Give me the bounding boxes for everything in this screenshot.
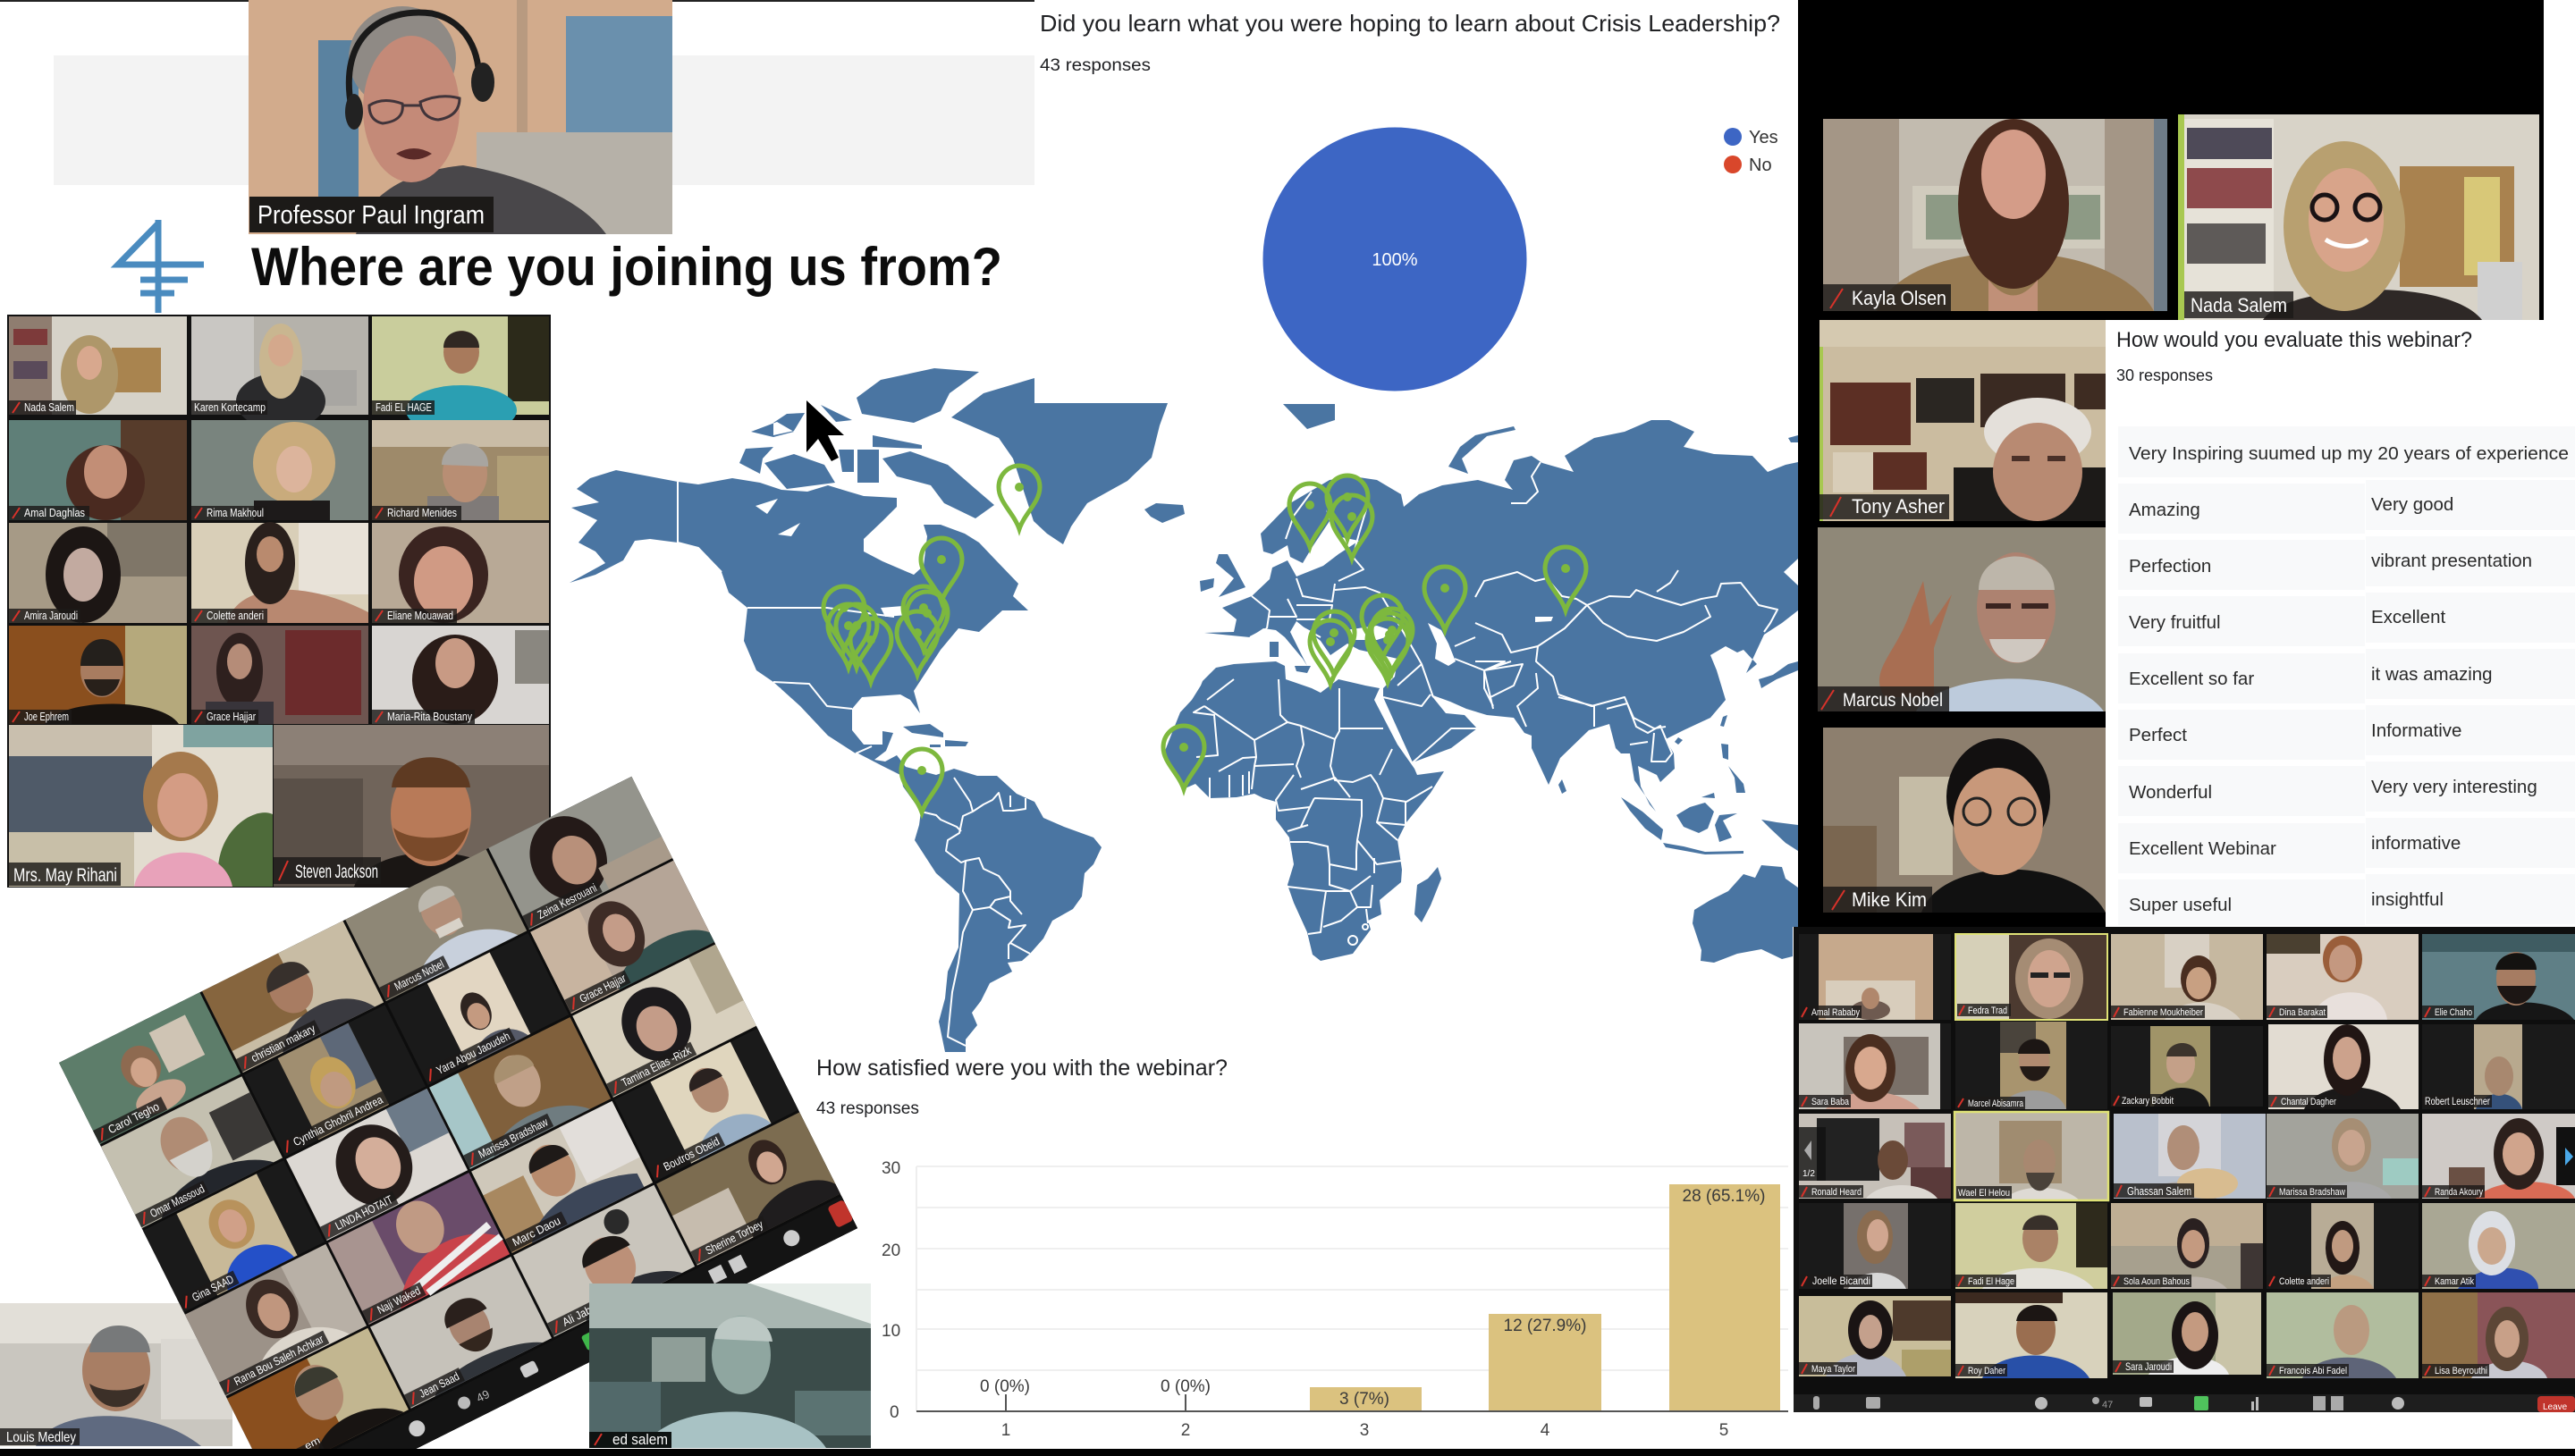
category labels: 1	[1001, 1421, 1010, 1440]
panel: learning pie chart	[1034, 0, 1798, 403]
video: Professor Paul Ingram	[249, 0, 672, 234]
tile: Colette anderi: Colette anderi	[207, 609, 264, 622]
video: Marcus Nobel: Marcus Nobel	[1843, 690, 1943, 711]
category labels: 4	[1541, 1421, 1550, 1440]
tile: Mrs. May Rihani	[9, 725, 273, 887]
tile: Sola Aoun Bahous	[2111, 1203, 2263, 1289]
panel: speakers column	[1818, 114, 2539, 913]
tile: Omar Massoud: Omar Massoud	[148, 1182, 207, 1220]
tile: Ronald Heard: Ronald Heard	[1811, 1187, 1862, 1198]
legend	[1724, 128, 1778, 175]
world map with participant pins	[570, 368, 1798, 1052]
tile: Amal Daghlas	[9, 420, 187, 520]
name label: Professor Paul Ingram	[258, 201, 485, 230]
North and Central America	[570, 470, 1028, 787]
tile: Nada Salem	[9, 316, 187, 415]
tile: Sherine Torbey: Sherine Torbey	[703, 1217, 765, 1258]
video: Mike Kim	[1823, 728, 2106, 913]
response text: Very very interesting	[2371, 777, 2537, 797]
tile: Fadi EL HAGE: Fadi EL HAGE	[376, 400, 432, 414]
tile: Sara Baba	[1799, 1023, 1951, 1109]
tile: Marcus Nobel: Marcus Nobel	[393, 957, 446, 993]
tile: Robert Leuschner: Robert Leuschner	[2425, 1097, 2490, 1107]
tile: Nada Salem: Nada Salem	[24, 400, 74, 414]
video: ed salem	[589, 1283, 871, 1448]
toolbar of rotated grid: 49	[474, 1387, 492, 1405]
tile: Amira Jaroudi: Amira Jaroudi	[24, 609, 78, 622]
tile: Boutros Obeid	[614, 1028, 798, 1182]
tile: Maria-Rita Boustany	[372, 626, 549, 724]
tile: Eliane Mouawad	[372, 523, 549, 623]
tile: Francois Abi Fadel	[2267, 1292, 2419, 1378]
title: Where are you joining us from?	[251, 237, 1002, 297]
tile: Naji Waked	[328, 1173, 510, 1325]
tile: Omar Massoud	[101, 1076, 283, 1228]
tile: Joe Ephrem rotated	[227, 1328, 409, 1456]
tile: Marissa Bradshaw	[2267, 1114, 2419, 1199]
tile: Wael El Helou: Wael El Helou	[1958, 1188, 2010, 1199]
tile: Carol Tegho: Carol Tegho	[106, 1099, 161, 1136]
tile: Ali Jaber: Ali Jaber	[560, 1299, 603, 1329]
tile: Dina Barakat	[2267, 934, 2419, 1020]
video: Louis Medley	[0, 1303, 232, 1446]
heading: evaluate question: How would you evaluate this webinar?	[2116, 328, 2472, 352]
Caribbean islands	[903, 724, 968, 747]
tile: Jean Saad	[370, 1257, 552, 1409]
tile: Amira Jaroudi	[9, 523, 187, 623]
Siberian river and lake lines	[1511, 462, 1678, 592]
tile: Marcus Nobel	[345, 849, 527, 1001]
tile: Grace Hajjar: Grace Hajjar	[207, 710, 257, 723]
y axis labels: 30	[882, 1159, 900, 1178]
tile: Amal Rababy: Amal Rababy	[1811, 1007, 1860, 1018]
baseline	[916, 1394, 1788, 1411]
panel: black speaker backdrop	[1798, 0, 2544, 927]
tile: Sara Jaroudi	[2113, 1292, 2261, 1375]
video: ed salem: ed salem	[612, 1431, 668, 1448]
icon: blue institute logo	[118, 220, 204, 313]
toolbar of lower-right grid	[1794, 1394, 2575, 1412]
category labels: 3	[1360, 1421, 1369, 1440]
value labels: 3 (7%)	[1339, 1390, 1389, 1409]
tile: Francois Abi Fadel: Francois Abi Fadel	[2279, 1366, 2347, 1376]
value labels: 0 (0%)	[1161, 1377, 1211, 1396]
tile: Rana Bou Saleh Achkar: Rana Bou Saleh Achkar	[232, 1332, 326, 1388]
tile: Naji Waked: Naji Waked	[375, 1283, 423, 1317]
text: bar responses: 43 responses	[816, 1099, 919, 1118]
response text: Super useful	[2129, 895, 2232, 915]
tile: Fedra Trad	[1955, 934, 2107, 1020]
tile: Elie Chaho: Elie Chaho	[2435, 1007, 2472, 1018]
panel: evaluate webinar responses	[2106, 320, 2575, 927]
tile: Carol Tegho	[59, 992, 241, 1144]
video: Nada Salem	[2178, 114, 2539, 320]
panel: lower-right video grid	[1794, 927, 2575, 1412]
tile: Joe Ephrem: Joe Ephrem	[24, 710, 69, 723]
tile: Robert Leuschner	[2422, 1024, 2575, 1109]
panel: left video grid	[7, 315, 551, 888]
response text: Very Inspiring suumed up my 20 years of experience	[2129, 443, 2569, 464]
video: Nada Salem: Nada Salem	[2191, 294, 2287, 316]
tile: Boutros Obeid: Boutros Obeid	[662, 1134, 722, 1174]
response text: informative	[2371, 833, 2461, 854]
response row backgrounds	[2118, 426, 2575, 925]
tile: Chantal Dagher: Chantal Dagher	[2281, 1097, 2336, 1107]
pie chart: 100%	[1372, 250, 1418, 270]
tile: Marcel Abisamra: Marcel Abisamra	[1968, 1098, 2024, 1109]
tile: Cynthia Ghobril Andrea	[244, 1005, 426, 1157]
icon: mouse cursor	[806, 400, 844, 461]
tile: Karen Kortecamp: Karen Kortecamp	[194, 400, 266, 414]
tile: Sara Jaroudi: Sara Jaroudi	[2125, 1360, 2172, 1373]
response text: Wonderful	[2129, 782, 2212, 803]
tile: Joe Ephrem rotated: em	[303, 1435, 322, 1452]
tile: Mrs. May Rihani: Mrs. May Rihani	[13, 865, 117, 886]
tile: Marc Daou	[471, 1101, 653, 1253]
pins	[823, 466, 1586, 812]
tile: Gina SAAD	[143, 1160, 325, 1312]
tile: christian makary	[202, 921, 384, 1073]
video: Tony Asher	[1819, 320, 2106, 521]
response text: vibrant presentation	[2371, 551, 2532, 571]
tile: Kamar Atik	[2422, 1203, 2575, 1289]
Greenland and Ellesmere	[857, 368, 1168, 544]
video: Kayla Olsen: Kayla Olsen	[1852, 287, 1946, 309]
South America	[901, 769, 1102, 1052]
response text	[2129, 443, 2569, 915]
tile: Joelle Bicandi: Joelle Bicandi	[1812, 1275, 1870, 1287]
category labels: 5	[1719, 1421, 1728, 1440]
video: Tony Asher: Tony Asher	[1852, 495, 1945, 518]
tile: Wael El Helou	[1954, 1112, 2108, 1200]
response text: Perfect	[2129, 725, 2187, 745]
Australia	[1693, 865, 1798, 963]
chart grid	[916, 1166, 1788, 1411]
tile: Joe Ephrem	[9, 626, 187, 724]
tile: Marc Daou: Marc Daou	[510, 1214, 562, 1249]
value labels: 12 (27.9%)	[1504, 1317, 1586, 1335]
tile: Karen Kortecamp	[191, 316, 368, 430]
tile: Amal Rababy	[1799, 934, 1951, 1020]
legend: Yes	[1749, 128, 1778, 147]
tile: christian makary: christian makary	[249, 1022, 317, 1065]
tile: Randa Akoury: Randa Akoury	[2435, 1187, 2483, 1198]
tile: LINDA HOTAIT: LINDA HOTAIT	[333, 1192, 395, 1233]
video: Louis Medley: Louis Medley	[6, 1430, 76, 1445]
video: Marcus Nobel	[1818, 527, 2106, 711]
tile: Grace Hajjar rotated: Grace Hajjar	[578, 971, 629, 1006]
tile: Roy Daher	[1955, 1292, 2107, 1378]
tile: Cynthia Ghobril Andrea: Cynthia Ghobril Andrea	[291, 1092, 385, 1149]
tile: Tamina Elias -Rizk	[572, 945, 756, 1098]
tile: Maya Taylor: Maya Taylor	[1811, 1364, 1855, 1375]
text: evaluate responses: 30 responses	[2116, 366, 2213, 384]
toolbar of rotated grid	[322, 1196, 857, 1456]
legend: No	[1749, 156, 1772, 175]
tile: Tamina Elias -Rizk: Tamina Elias -Rizk	[620, 1043, 694, 1090]
tile: Colette anderi	[2267, 1203, 2419, 1289]
toolbar of lower-right grid: 47	[2102, 1400, 2113, 1410]
toolbar of lower-right grid: Leave	[2543, 1402, 2568, 1412]
tile: Sola Aoun Bahous: Sola Aoun Bahous	[2123, 1276, 2190, 1287]
tile: Marissa Bradshaw	[429, 1017, 611, 1169]
response text: Perfection	[2129, 556, 2211, 577]
tile: Grace Hajjar	[191, 626, 368, 724]
video: Kayla Olsen	[1823, 119, 2167, 311]
panel: satisfaction bar chart	[805, 1052, 1794, 1450]
Arctic islands	[739, 405, 994, 518]
tile: Sherine Torbey	[656, 1112, 840, 1266]
response text: Amazing	[2129, 500, 2200, 520]
tile: Lisa Beyrouthi	[2422, 1292, 2575, 1378]
Africa	[1165, 661, 1444, 961]
tile: Sara Baba: Sara Baba	[1811, 1097, 1850, 1107]
tile: Steven Jackson: Steven Jackson	[295, 862, 378, 882]
value labels	[980, 1187, 1765, 1409]
response text: Very fruitful	[2129, 612, 2221, 633]
tile: Lisa Beyrouthi: Lisa Beyrouthi	[2435, 1366, 2487, 1376]
tile: Colette anderi	[191, 522, 368, 623]
tile: Rima Makhoul: Rima Makhoul	[207, 506, 264, 519]
tile: Amal Daghlas: Amal Daghlas	[24, 506, 85, 519]
response text: Excellent Webinar	[2129, 838, 2276, 859]
tile: Grace Hajjar rotated	[530, 861, 714, 1014]
European and polar islands	[1144, 404, 1515, 673]
tile: Ghassan Salem	[2114, 1114, 2266, 1199]
tile: Fadi El Hage	[1955, 1203, 2107, 1289]
response text: Informative	[2371, 720, 2461, 741]
tile: Jean Saad: Jean Saad	[417, 1369, 461, 1401]
bottom black band	[0, 1449, 2575, 1456]
tile: Marissa Bradshaw: Marissa Bradshaw	[476, 1115, 551, 1161]
tile: Colette anderi: Colette anderi	[2279, 1276, 2329, 1287]
heading: pie question: Did you learn what you were hoping to learn about Crisis Leadership?	[1040, 10, 1780, 37]
tile: Joelle Bicandi	[1799, 1203, 1951, 1289]
response text: Excellent so far	[2129, 669, 2254, 689]
response text: insightful	[2371, 889, 2444, 910]
tile: Zackary Bobbit: Zackary Bobbit	[2122, 1096, 2174, 1107]
tile: Fadi El Hage: Fadi El Hage	[1968, 1276, 2014, 1287]
tile: Zeina Kesrouani	[488, 777, 672, 930]
tile: Gina SAAD: Gina SAAD	[190, 1272, 236, 1304]
tile: Ghassan Salem: Ghassan Salem	[2127, 1184, 2191, 1198]
panel: rotated video grid	[59, 777, 857, 1456]
y axis labels	[882, 1159, 900, 1422]
y axis labels: 10	[882, 1322, 900, 1341]
heading: bar question: How satisfied were you with the webinar?	[816, 1056, 1228, 1081]
tile: Yara Abou Jaoudeh: Yara Abou Jaoudeh	[434, 1029, 512, 1077]
pie chart	[1262, 127, 1527, 391]
y axis labels: 0	[890, 1403, 899, 1422]
response text: it was amazing	[2371, 664, 2493, 685]
tile: Ali Jaber	[513, 1185, 695, 1337]
tile: Marissa Bradshaw: Marissa Bradshaw	[2279, 1187, 2345, 1198]
tile: Ronald Heard: 1/2	[1802, 1169, 1815, 1179]
tile: Maria-Rita Boustany: Maria-Rita Boustany	[387, 710, 472, 723]
tile: Maya Taylor	[1799, 1296, 1951, 1376]
tile: Rana Bou Saleh Achkar	[185, 1244, 367, 1396]
Eurasia	[1204, 420, 1798, 812]
lakes and inland seas	[756, 499, 1553, 666]
tile: Yara Abou Jaoudeh	[387, 933, 569, 1085]
tile: Zeina Kesrouani: Zeina Kesrouani	[536, 880, 599, 922]
tile: Fabienne Moukheiber: Fabienne Moukheiber	[2123, 1007, 2203, 1018]
tile: Fadi EL HAGE	[372, 316, 549, 435]
tile: Roy Daher: Roy Daher	[1968, 1366, 2005, 1376]
tile: Steven Jackson	[274, 725, 549, 887]
tile: Elie Chaho	[2422, 934, 2575, 1020]
tile: Dina Barakat: Dina Barakat	[2279, 1007, 2326, 1018]
tile: Rima Makhoul	[191, 420, 368, 520]
tile: Ronald Heard	[1799, 1114, 1951, 1199]
bars	[1310, 1184, 1780, 1411]
tile: Richard Menides: Richard Menides	[387, 506, 457, 519]
category labels	[1001, 1421, 1728, 1440]
tile: Kamar Atik: Kamar Atik	[2435, 1276, 2474, 1287]
tile: LINDA HOTAIT	[286, 1089, 468, 1241]
tile: Eliane Mouawad: Eliane Mouawad	[387, 609, 453, 622]
response text: Very good	[2371, 494, 2453, 515]
response text: Excellent	[2371, 607, 2445, 627]
value labels: 0 (0%)	[980, 1377, 1030, 1396]
grey slide header bar	[54, 55, 1034, 185]
y axis labels: 20	[882, 1241, 900, 1260]
value labels: 28 (65.1%)	[1683, 1187, 1765, 1206]
video: Mike Kim: Mike Kim	[1852, 888, 1927, 911]
tile: Zackary Bobbit	[2111, 1026, 2263, 1107]
tile: Fabienne Moukheiber	[2111, 934, 2263, 1020]
tile: Marcel Abisamra	[1955, 1022, 2107, 1109]
tile: Randa Akoury	[2422, 1114, 2575, 1199]
country borders	[678, 482, 1030, 1046]
tile: Richard Menides	[372, 420, 549, 520]
Madagascar	[1414, 867, 1441, 922]
Asia-Pacific islands	[1558, 435, 1798, 854]
text: pie responses: 43 responses	[1040, 56, 1151, 75]
tile: Chantal Dagher	[2268, 1024, 2419, 1109]
tile: Fedra Trad: Fedra Trad	[1968, 1006, 2007, 1016]
category labels: 2	[1181, 1421, 1190, 1440]
